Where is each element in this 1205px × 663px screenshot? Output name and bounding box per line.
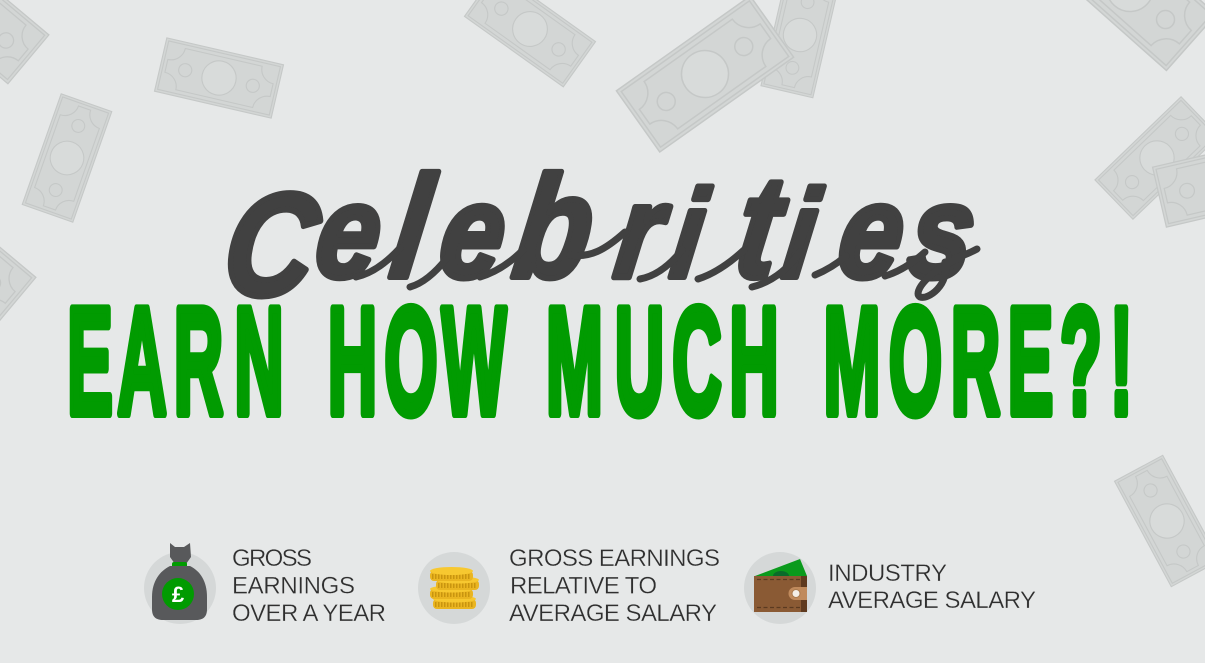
banknote: lower right [1115, 455, 1205, 587]
banknote: large centre [616, 0, 794, 152]
legend: gross earnings over a year [144, 543, 386, 627]
legend: gross earnings relative to average salary [418, 545, 720, 627]
banknote: top centre [464, 0, 596, 87]
banknote: behind large note [761, 0, 839, 98]
icon: coins [418, 552, 490, 624]
legend text: gross earnings over a year: EARNINGS [232, 572, 355, 600]
banknote: top left corner [0, 0, 49, 84]
legend text: gross earnings relative to average salary: RELATIVE TO [510, 572, 657, 600]
banknote: left edge [0, 188, 36, 326]
legend text: gross earnings relative to average salary: GROSS EARNINGS [509, 545, 720, 572]
legend text: gross earnings over a year: GROSS [232, 545, 312, 572]
icon: money bag [144, 543, 216, 624]
banknote: right [1095, 97, 1205, 219]
legend text: industry average salary: INDUSTRY [828, 560, 947, 587]
legend: industry average salary [744, 552, 1036, 624]
legend text: industry average salary: AVERAGE SALARY [828, 587, 1036, 614]
banknote: upper left [155, 38, 283, 118]
icon: wallet [744, 552, 816, 624]
legend text: gross earnings over a year: OVER A YEAR [232, 600, 386, 627]
title: Celebrities: lebrities [383, 145, 984, 308]
banknote: right overlapping [1153, 137, 1205, 227]
legend text: gross earnings relative to average salary: AVERAGE SALARY [509, 600, 717, 627]
banknote: left [22, 94, 112, 222]
icon: money bag: £ [172, 582, 185, 607]
title: Earn how much more: EARN HOW MUCH MORE?! [67, 276, 1133, 446]
title: Celebrities: e [308, 158, 391, 306]
banknote: top right corner [1044, 0, 1205, 70]
title: Celebrities: C [215, 163, 329, 326]
